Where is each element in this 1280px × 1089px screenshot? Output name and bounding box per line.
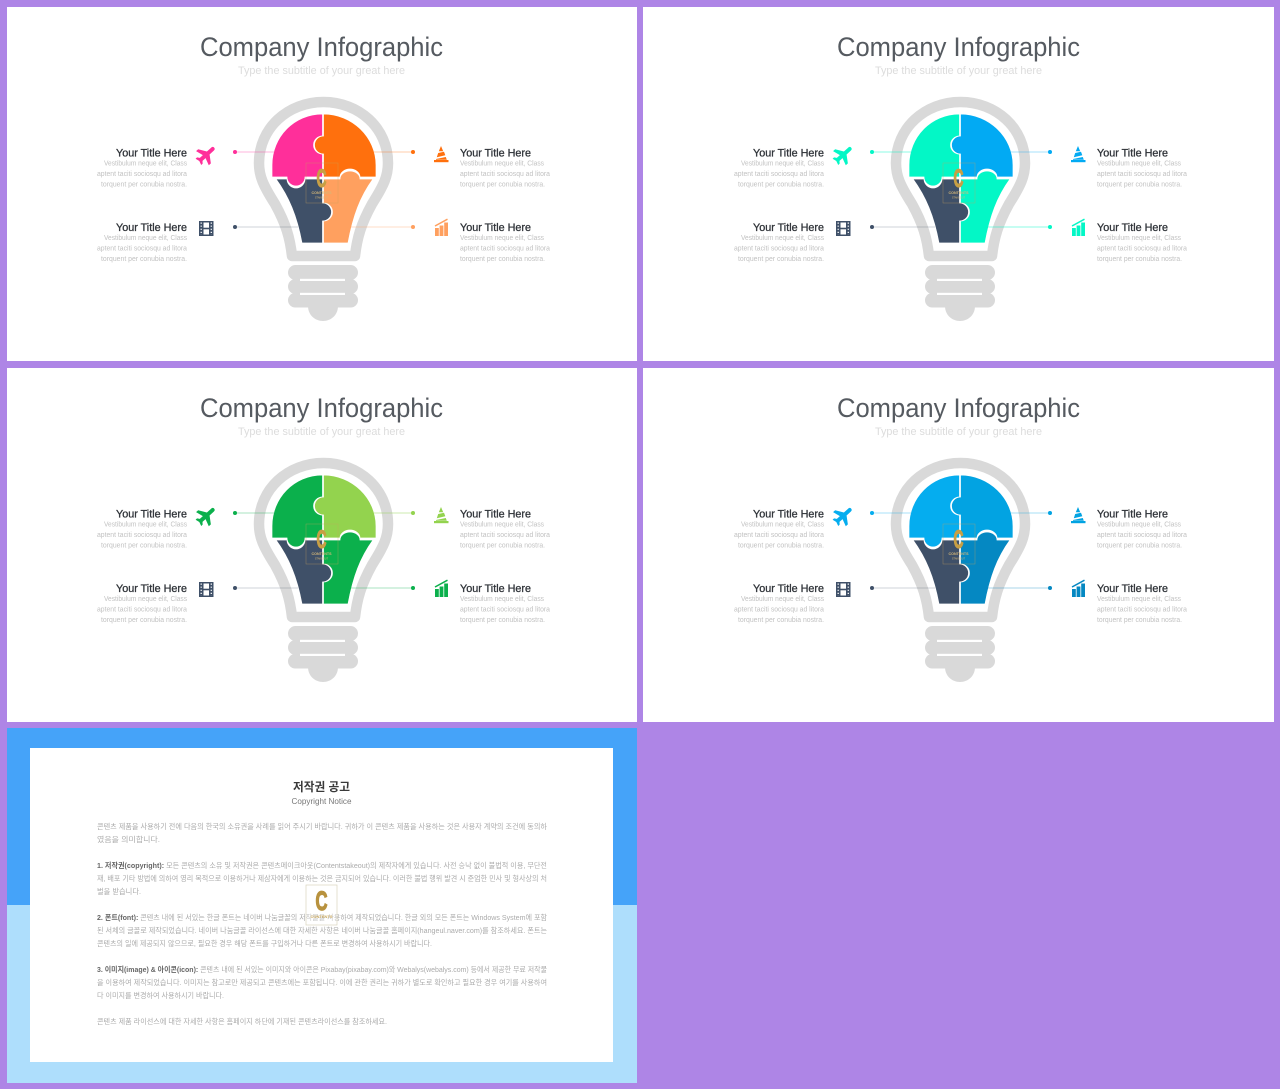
subtitle: Type the subtitle of your great here xyxy=(875,426,1042,438)
text block: top left: Vestibulum neque elit, Class xyxy=(104,522,187,528)
puzzle pieces xyxy=(272,114,376,243)
text block: bottom left: aptent taciti sociosqu ad litora xyxy=(734,606,824,614)
text block: top left: Vestibulum neque elit, Class xyxy=(104,160,187,168)
heading: copyright notice Korean: 저작권 공고 xyxy=(293,779,350,794)
text block: top right xyxy=(460,508,550,550)
text block: bottom right xyxy=(1097,583,1187,624)
text block: notice body: 콘텐츠의 일에 제공되지 않으므로, 필요한 경우 해당 폰트를 구입하거나 다른 폰트로 변경하여 사용하시기 바랍니다. xyxy=(97,938,432,948)
text block: bottom left: aptent taciti sociosqu ad litora xyxy=(97,606,187,614)
text block: bottom left: Your Title Here xyxy=(753,222,824,234)
subheading: copyright notice English: Copyright Notice xyxy=(292,796,352,806)
text block: bottom left: torquent per conubia nostra. xyxy=(101,256,187,263)
icon: film strip xyxy=(199,221,214,236)
text block: top left: Vestibulum neque elit, Class xyxy=(741,522,824,528)
text block: bottom left: Your Title Here xyxy=(753,583,824,595)
text block: top right: aptent taciti sociosqu ad litora xyxy=(460,171,550,178)
text block: top left: torquent per conubia nostra. xyxy=(738,542,824,550)
text block: bottom right: torquent per conubia nostra. xyxy=(460,256,545,263)
text block: bottom left: Vestibulum neque elit, Class xyxy=(104,235,187,242)
text block: bottom left: Vestibulum neque elit, Class xyxy=(741,596,824,603)
text block: bottom left: aptent taciti sociosqu ad litora xyxy=(97,246,187,252)
logo watermark: CONTENTS xyxy=(310,914,333,919)
text block: top left: aptent taciti sociosqu ad litora xyxy=(734,532,824,539)
connector lines xyxy=(870,511,1052,590)
panel: copyright notice xyxy=(7,728,637,1083)
subtitle: Type the subtitle of your great here xyxy=(875,65,1042,77)
icon: growth chart xyxy=(435,219,448,236)
text block: top right: torquent per conubia nostra. xyxy=(1097,182,1182,188)
text block: top left: torquent per conubia nostra. xyxy=(101,542,187,550)
text block: bottom right: aptent taciti sociosqu ad litora xyxy=(460,246,550,252)
text block: notice body: 콘텐츠 제품 라이선스에 대한 자세한 사항은 홈페이지 하단에 기재된 콘텐츠라이선스를 참조하세요. xyxy=(97,1016,387,1026)
text block: bottom right: torquent per conubia nostra. xyxy=(460,617,545,624)
icon: growth chart xyxy=(1072,219,1085,236)
text block: bottom right: aptent taciti sociosqu ad litora xyxy=(1097,606,1187,614)
icon: film strip xyxy=(836,582,850,597)
icon: airplane xyxy=(829,141,858,169)
text block: bottom right: Vestibulum neque elit, Class xyxy=(460,596,544,603)
text block: bottom left: Your Title Here xyxy=(116,222,187,234)
text block: notice body: 1. 저작권(copyright): 모든 콘텐츠의 소유 및 저작권은 콘텐츠메이크아웃(Contentstakeout)의 제작자에게 있습니다. 사전 승낙 없이 불법적 이용, 무단전 xyxy=(97,860,547,870)
text block: notice body: 재, 배포 기타 방법에 의하여 영리 목적으로 이용하거나 제삼자에게 이용하는 것은 금지되어 있습니다. 이러한 불법 행위 발견 시 준엄한 민사 및 형사상의 처 xyxy=(97,873,547,883)
logo watermark xyxy=(306,885,337,925)
text block: top left: Your Title Here xyxy=(753,148,824,160)
icon: airplane xyxy=(192,502,221,530)
text block: bottom left: Your Title Here xyxy=(116,583,187,595)
text block: bottom right: torquent per conubia nostra. xyxy=(1097,617,1182,624)
text block: bottom left xyxy=(734,222,824,263)
text block: notice body: 3. 이미지(image) & 아이콘(icon): 콘텐츠 내에 된 서있는 이미지와 아이콘은 Pixabay(pixabay.com)와 Webalys(webalys.com) 등에서 제공한 무료 저작물 xyxy=(97,964,547,974)
text block: bottom left xyxy=(734,583,824,624)
text block: top left: Vestibulum neque elit, Class xyxy=(741,160,824,168)
text block: top left xyxy=(734,508,824,550)
puzzle pieces xyxy=(272,475,376,604)
text block: top right: torquent per conubia nostra. xyxy=(460,542,545,550)
text block: notice body: 다 이미지를 변경하여 사용하시기 바랍니다. xyxy=(97,990,224,1000)
text block: top left: aptent taciti sociosqu ad litora xyxy=(734,171,824,178)
text block: top left xyxy=(97,508,187,550)
text block: bottom right xyxy=(460,583,550,624)
lightbulb outline xyxy=(896,463,1025,682)
text block: notice body: 벌을 받습니다. xyxy=(97,886,141,896)
text block: notice body: 2. 폰트(font): 콘텐츠 내에 된 서있는 한글 폰트는 네이버 나눔글꼴의 저작물을 사용하여 제작되었습니다. 한글 외의 모든 폰트는 Windows System에 포함 xyxy=(97,912,547,922)
text block: bottom left: torquent per conubia nostra. xyxy=(101,617,187,624)
text block: top left: torquent per conubia nostra. xyxy=(738,182,824,188)
title: Company Infographic xyxy=(837,32,1080,62)
connector lines xyxy=(233,150,415,229)
text block: top right: Your Title Here xyxy=(1097,508,1168,520)
text block: top right: Your Title Here xyxy=(460,508,531,520)
lightbulb outline xyxy=(896,102,1025,321)
text block: bottom right xyxy=(1097,222,1187,263)
text block: bottom right xyxy=(460,222,550,263)
subtitle: Type the subtitle of your great here xyxy=(238,65,405,77)
text block: top right xyxy=(1097,508,1187,550)
text block: top left: Your Title Here xyxy=(753,508,824,520)
icon: traffic cone xyxy=(1071,507,1086,523)
text block: top right: Your Title Here xyxy=(460,148,531,160)
text block: top left xyxy=(97,148,187,188)
lightbulb outline xyxy=(259,102,388,321)
text block: top right: Your Title Here xyxy=(1097,148,1168,160)
text block: bottom right: Your Title Here xyxy=(460,583,531,595)
icon: airplane xyxy=(829,502,858,530)
text block: top right: aptent taciti sociosqu ad litora xyxy=(1097,171,1187,178)
puzzle pieces xyxy=(909,475,1013,604)
text block: top right: Vestibulum neque elit, Class xyxy=(460,160,544,168)
text block: notice body xyxy=(97,821,547,1026)
text block: top right: aptent taciti sociosqu ad litora xyxy=(1097,532,1187,539)
panel: slide 3 green xyxy=(7,368,637,722)
icon: traffic cone xyxy=(1071,146,1086,162)
connector lines xyxy=(870,150,1052,229)
text block: bottom right: Vestibulum neque elit, Class xyxy=(1097,235,1181,242)
text block: top right xyxy=(460,148,550,188)
text block: top right: torquent per conubia nostra. xyxy=(460,182,545,188)
text block: notice body: 을 이용하여 제작되었습니다. 이미지는 참고로만 제공되고 콘텐츠에는 포함됩니다. 이에 관한 권리는 귀하가 별도로 확인하고 필요한 경우 여기를 사용하여 xyxy=(97,977,547,987)
text block: notice body: 였음을 의미합니다. xyxy=(97,834,160,844)
icon: growth chart xyxy=(1072,580,1085,597)
text block: notice body: 된 서체의 글꼴로 제작되었습니다. 네이버 나눔글꼴 라이선스에 대한 자세한 사항은 네이버 나눔글꼴 홈페이지(hangeul.naver.com)를 참조하세요. 폰트는 xyxy=(97,925,547,935)
text block: top left: aptent taciti sociosqu ad litora xyxy=(97,171,187,178)
text block: bottom right: Your Title Here xyxy=(1097,583,1168,595)
text block: bottom right: Vestibulum neque elit, Class xyxy=(460,235,544,242)
icon: film strip xyxy=(836,221,850,236)
text block: bottom right: torquent per conubia nostra. xyxy=(1097,256,1182,263)
panel: slide 4 blue xyxy=(643,368,1274,722)
icon: film strip xyxy=(199,582,214,597)
logo watermark xyxy=(306,163,338,203)
text block: bottom left: torquent per conubia nostra. xyxy=(738,617,824,624)
icon: traffic cone xyxy=(434,507,448,523)
logo watermark: C xyxy=(316,886,328,916)
puzzle pieces xyxy=(909,114,1013,243)
text block: bottom right: aptent taciti sociosqu ad litora xyxy=(460,606,550,614)
text block: top left: Your Title Here xyxy=(116,148,187,160)
text block: top right: Vestibulum neque elit, Class xyxy=(1097,522,1181,528)
title: Company Infographic xyxy=(200,32,443,62)
text block: top right: Vestibulum neque elit, Class xyxy=(460,522,544,528)
text block: bottom left: Vestibulum neque elit, Class xyxy=(104,596,187,603)
text block: top left: torquent per conubia nostra. xyxy=(101,182,187,188)
logo watermark xyxy=(306,524,338,564)
text block: bottom right: Your Title Here xyxy=(1097,222,1168,234)
logo watermark xyxy=(943,524,975,564)
icon: traffic cone xyxy=(434,146,448,162)
text block: top left: Your Title Here xyxy=(116,508,187,520)
title: Company Infographic xyxy=(200,393,443,423)
text block: bottom left: aptent taciti sociosqu ad litora xyxy=(734,246,824,252)
panel: slide 2 teal and blue xyxy=(643,7,1274,361)
text block: bottom right: aptent taciti sociosqu ad litora xyxy=(1097,246,1187,252)
text block: top left: aptent taciti sociosqu ad litora xyxy=(97,532,187,539)
text block: top left xyxy=(734,148,824,188)
subtitle: Type the subtitle of your great here xyxy=(238,426,405,438)
text block: top right: aptent taciti sociosqu ad litora xyxy=(460,532,550,539)
title: Company Infographic xyxy=(837,393,1080,423)
connector lines xyxy=(233,511,415,590)
icon: airplane xyxy=(192,141,221,169)
text block: top right xyxy=(1097,148,1187,188)
text block: notice body: 콘텐츠 제품을 사용하기 전에 다음의 한국의 소유권을 사례를 읽어 주시기 바랍니다. 귀하가 이 콘텐츠 제품을 사용하는 것은 사용자 계약의 조건에 동의하 xyxy=(97,821,547,831)
text block: top right: Vestibulum neque elit, Class xyxy=(1097,160,1181,168)
text block: bottom right: Vestibulum neque elit, Class xyxy=(1097,596,1181,603)
text block: bottom left xyxy=(97,222,187,263)
text block: bottom left: torquent per conubia nostra. xyxy=(738,256,824,263)
text block: bottom left: Vestibulum neque elit, Class xyxy=(741,235,824,242)
lightbulb outline xyxy=(259,463,388,682)
text block: bottom right: Your Title Here xyxy=(460,222,531,234)
logo watermark xyxy=(943,163,975,203)
text block: top right: torquent per conubia nostra. xyxy=(1097,542,1182,550)
text block: bottom left xyxy=(97,583,187,624)
panel: slide 1 pink and orange xyxy=(7,7,637,361)
icon: growth chart xyxy=(435,580,448,597)
